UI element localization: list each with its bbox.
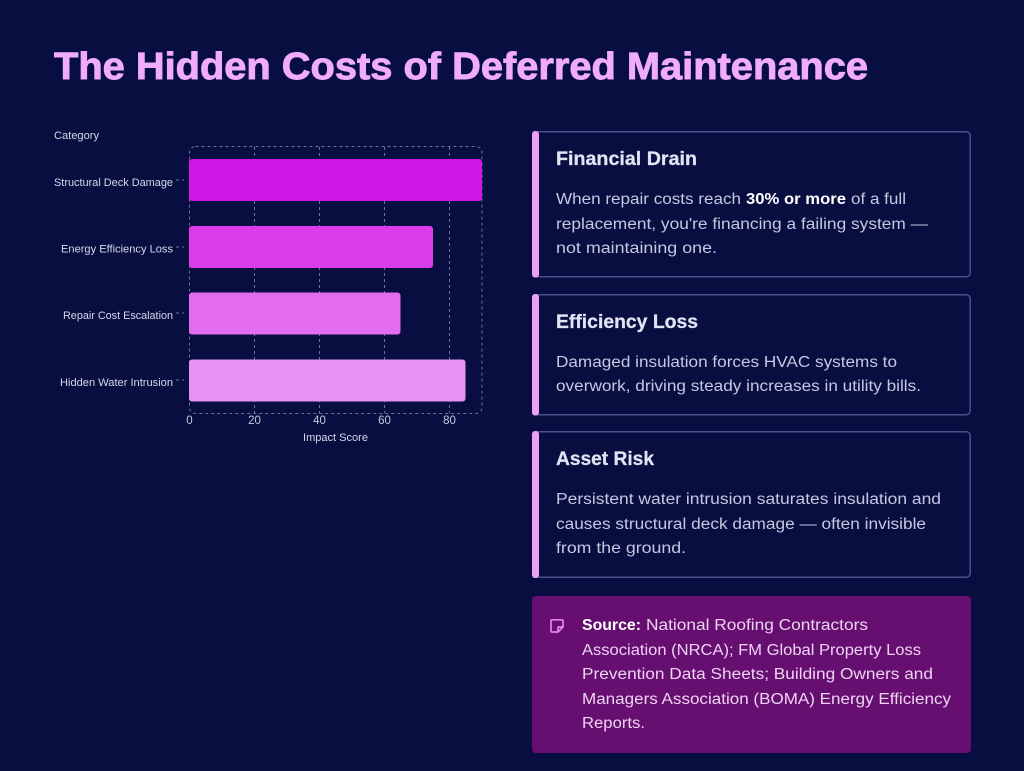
body text: Damaged insulation forces HVAC systems to xyxy=(556,354,897,371)
body text xyxy=(556,191,929,257)
body text: overwork, driving steady increases in utility bills. xyxy=(556,378,921,395)
x axis ticks: 80 xyxy=(443,415,456,427)
x axis ticks: 20 xyxy=(248,415,261,427)
body text: When repair costs reach xyxy=(556,191,741,208)
source text: Association (NRCA); FM Global Property Loss xyxy=(582,642,921,659)
bar: Structural Deck Damage xyxy=(189,159,482,201)
x axis title: Impact Score xyxy=(303,432,368,444)
source text: Prevention Data Sheets; Building Owners and xyxy=(582,666,933,683)
category label: Hidden Water Intrusion xyxy=(60,377,173,389)
source text xyxy=(582,617,951,732)
chart y axis title: Category xyxy=(54,130,99,142)
source text: Managers Association (BOMA) Energy Efficiency xyxy=(582,691,951,708)
bar: Hidden Water Intrusion xyxy=(189,360,466,402)
panel: Financial Drain xyxy=(532,131,970,278)
icon: sticky note xyxy=(551,620,563,632)
body text: replacement, you're financing a failing system — xyxy=(556,216,929,233)
category label: Structural Deck Damage xyxy=(54,177,173,189)
body text: 30% or more xyxy=(746,191,846,208)
body text: from the ground. xyxy=(556,540,686,557)
title: The Hidden Costs of Deferred Maintenance xyxy=(54,46,868,88)
x axis ticks: 60 xyxy=(378,415,391,427)
category label: Repair Cost Escalation xyxy=(63,310,173,322)
panel: Asset Risk xyxy=(532,431,970,578)
bar: Repair Cost Escalation xyxy=(189,292,400,334)
heading: Financial Drain xyxy=(556,149,697,170)
bar: Energy Efficiency Loss xyxy=(189,226,433,268)
heading: Asset Risk xyxy=(556,449,654,470)
x axis ticks: 0 xyxy=(186,415,193,427)
panel: Efficiency Loss xyxy=(532,294,970,416)
source text: National Roofing Contractors xyxy=(646,617,868,634)
x axis ticks xyxy=(186,415,456,427)
body text xyxy=(556,491,941,557)
category label: Energy Efficiency Loss xyxy=(61,244,174,256)
heading: Efficiency Loss xyxy=(556,312,698,333)
panel: source note xyxy=(532,596,971,753)
body text: of a full xyxy=(851,191,906,208)
bar chart xyxy=(54,130,482,444)
body text: Persistent water intrusion saturates insulation and xyxy=(556,491,941,508)
body text: not maintaining one. xyxy=(556,240,717,257)
body text xyxy=(556,354,921,395)
source text: Reports. xyxy=(582,715,645,732)
body text: causes structural deck damage — often invisible xyxy=(556,516,926,533)
source text: Source: xyxy=(582,617,641,634)
x axis ticks: 40 xyxy=(313,415,326,427)
